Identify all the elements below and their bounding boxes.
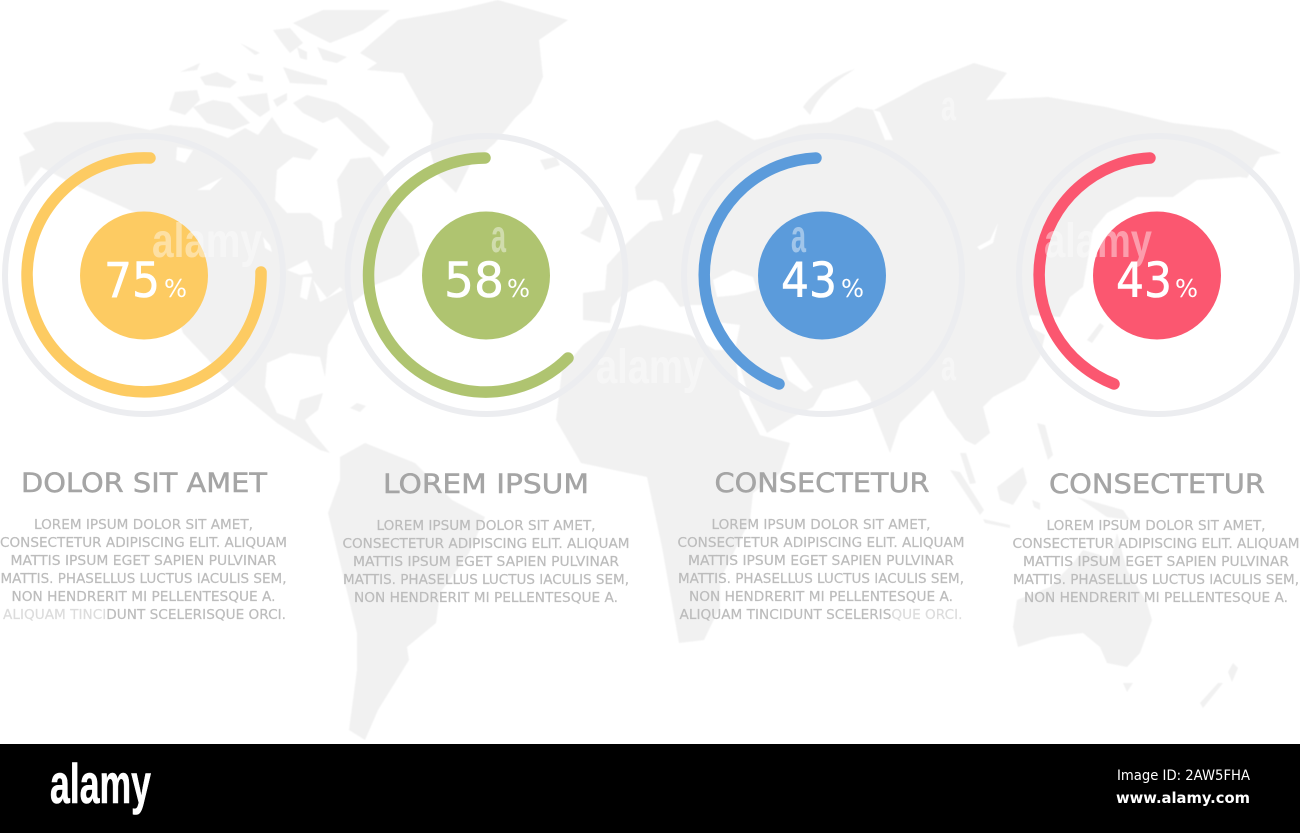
ring	[348, 136, 626, 414]
watermarks	[152, 82, 1152, 394]
description: LOREM IPSUM DOLOR SIT AMET,	[712, 518, 930, 533]
center disc	[1093, 212, 1221, 340]
ring	[1019, 136, 1297, 414]
description: MATTIS IPSUM EGET SAPIEN PULVINAR	[1023, 555, 1289, 570]
image id: Image ID: 2AW5FHA	[1117, 768, 1250, 784]
progress arc	[369, 158, 568, 392]
great lakes	[287, 260, 313, 275]
description: CONSECTETUR ADIPISCING ELIT. ALIQUAM	[1012, 537, 1300, 552]
watermarks: a	[791, 210, 806, 262]
description: NON HENDRERIT MI PELLENTESQUE A.	[12, 590, 276, 605]
percent sign: %	[1175, 274, 1198, 303]
description: ALIQUAM TINCIDUNT SCELERIS QUE ORCI.	[680, 608, 963, 623]
description: CONSECTETUR ADIPISCING ELIT. ALIQUAM	[342, 537, 630, 552]
description: MATTIS IPSUM EGET SAPIEN PULVINAR	[688, 554, 954, 569]
baltic sea	[672, 153, 703, 215]
description	[1012, 519, 1300, 606]
description: LOREM IPSUM DOLOR SIT AMET,	[376, 519, 596, 534]
description: MATTIS IPSUM EGET SAPIEN PULVINAR	[10, 554, 276, 569]
progress arc	[704, 158, 816, 384]
footer logo: alamy	[50, 752, 151, 815]
panel: red 43 percent	[1012, 136, 1300, 606]
center disc	[80, 212, 208, 340]
watermarks: a	[491, 210, 506, 262]
percent sign: %	[164, 274, 187, 303]
panel: blue 43 percent	[678, 136, 964, 623]
progress arc	[27, 158, 261, 392]
panel: green 58 percent	[342, 136, 630, 606]
percent sign: %	[841, 274, 864, 303]
watermarks: alamy	[1044, 215, 1152, 268]
lake baikal	[977, 223, 998, 250]
value: 58	[444, 253, 504, 309]
center disc	[758, 212, 886, 340]
description: LOREM IPSUM DOLOR SIT AMET,	[34, 518, 253, 533]
hudson bay	[275, 123, 353, 227]
value: 75	[104, 253, 160, 309]
panel: yellow 75 percent	[0, 136, 287, 623]
black sea	[713, 270, 757, 297]
watermarks: alamy	[596, 341, 704, 394]
description: NON HENDRERIT MI PELLENTESQUE A.	[1024, 591, 1288, 606]
value: 43	[781, 253, 837, 309]
website: www.alamy.com	[1116, 789, 1250, 807]
heading: CONSECTETUR	[714, 468, 930, 499]
description: MATTIS. PHASELLUS LUCTUS IACULIS SEM,	[678, 572, 964, 587]
progress arc	[1039, 158, 1150, 384]
description: NON HENDRERIT MI PELLENTESQUE A.	[354, 591, 618, 606]
persian gulf	[780, 357, 813, 392]
heading: CONSECTETUR	[1049, 469, 1265, 500]
description	[0, 518, 287, 623]
heading: LOREM IPSUM	[383, 469, 589, 500]
ring	[684, 136, 962, 414]
value: 43	[1116, 253, 1172, 309]
watermarks: a	[941, 82, 956, 129]
description: MATTIS. PHASELLUS LUCTUS IACULIS SEM,	[343, 573, 629, 588]
description	[678, 518, 964, 623]
description: CONSECTETUR ADIPISCING ELIT. ALIQUAM	[678, 536, 964, 551]
description: LOREM IPSUM DOLOR SIT AMET,	[1046, 519, 1266, 534]
heading: DOLOR SIT AMET	[21, 468, 268, 499]
watermarks: a	[941, 342, 956, 389]
description: MATTIS IPSUM EGET SAPIEN PULVINAR	[353, 555, 619, 570]
ring	[5, 136, 283, 414]
description: NON HENDRERIT MI PELLENTESQUE A.	[689, 590, 953, 605]
description	[342, 519, 630, 606]
description: MATTIS. PHASELLUS LUCTUS IACULIS SEM,	[1013, 573, 1299, 588]
description: ALIQUAM TINCI DUNT SCELERISQUE ORCI.	[3, 608, 286, 623]
canadian lakes	[176, 147, 193, 163]
center disc	[422, 212, 550, 340]
james bay	[322, 222, 335, 250]
watermarks: alamy	[152, 215, 262, 268]
description: MATTIS. PHASELLUS LUCTUS IACULIS SEM,	[0, 572, 286, 587]
footer bar	[0, 744, 1300, 833]
kara sea	[873, 110, 893, 140]
percent sign: %	[507, 274, 530, 303]
description: CONSECTETUR ADIPISCING ELIT. ALIQUAM	[0, 536, 287, 551]
